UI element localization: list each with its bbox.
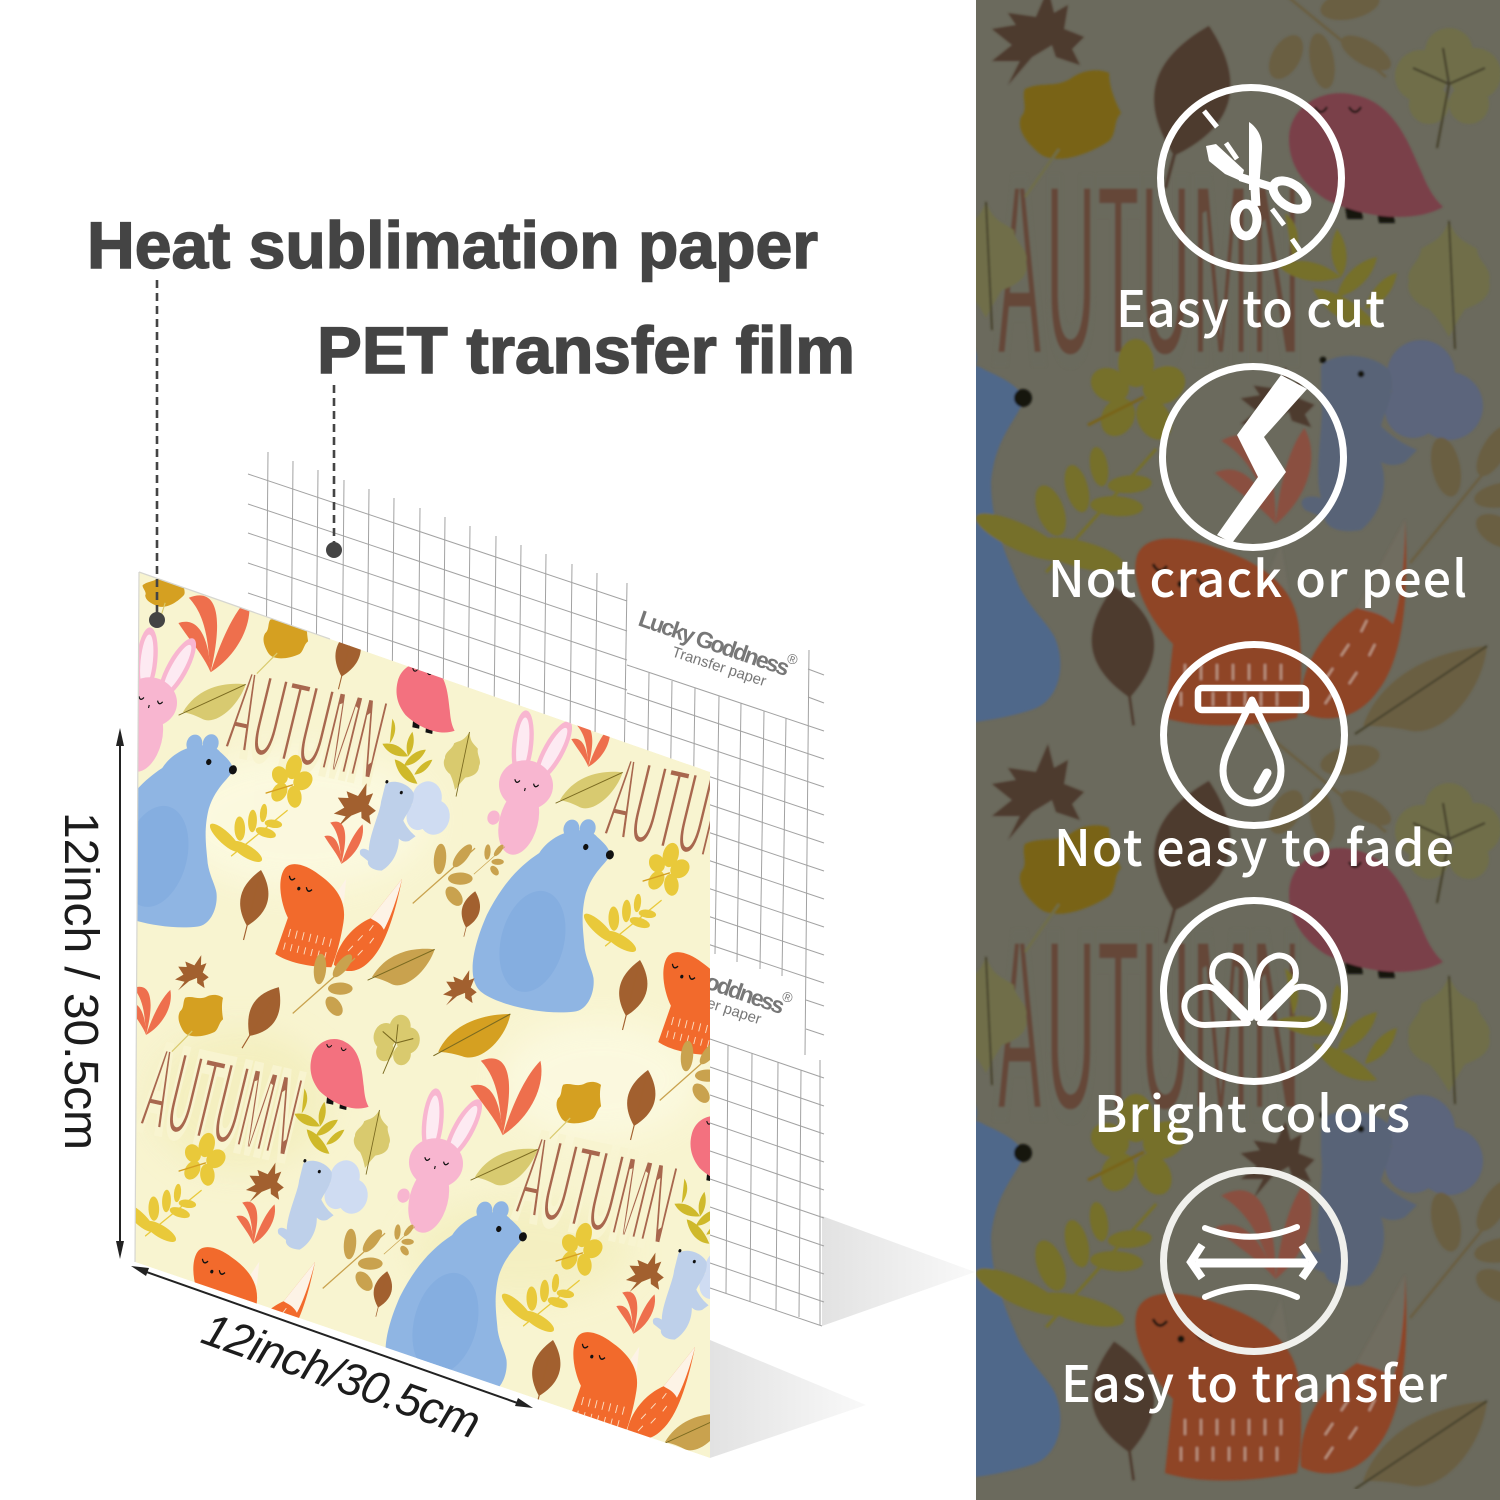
heading: PET transfer film: PET transfer film: [317, 313, 855, 387]
pattern: blue bears: [87, 716, 633, 1405]
sublimation paper with autumn animal pattern: [136, 573, 710, 1458]
label: height: 12inch / 30.5cm: [54, 812, 107, 1150]
pattern: squirrels: [274, 770, 750, 1352]
arrow: height dimension: [116, 728, 124, 1259]
background pattern artwork: AUTUMN: [994, 882, 1302, 1170]
panel: dark patterned feature column: [976, 0, 1500, 1500]
shadow: transfer film: [822, 1216, 975, 1326]
film brand label: lower: Lucky Goddness: [630, 943, 788, 1019]
pattern text: AUTUMN: [131, 643, 777, 1274]
feature: not easy to fade: [1054, 644, 1454, 881]
background pattern artwork: [976, 0, 1500, 1489]
film brand label: top: ®: [785, 650, 801, 668]
pattern: orange foxes: [175, 852, 786, 1450]
pattern: top row leaves: [138, 569, 623, 816]
arrow: width dimension: [131, 1266, 533, 1408]
icon: scissors in circle: [1160, 88, 1342, 268]
feature: not crack or peel: [1048, 366, 1467, 612]
heading: Heat sublimation paper: Heat sublimation paper: [87, 208, 818, 282]
feature: easy to cut: [1116, 88, 1385, 342]
caption: Not easy to fade: Not easy to fade: [1054, 809, 1454, 881]
leader line: sublimation paper: [149, 280, 165, 628]
pattern: pink owls: [301, 658, 763, 1192]
icon: squeegee and drop in circle: [1164, 644, 1344, 826]
pattern: pink bunnies: [104, 622, 580, 1241]
pattern text: AUTUMN: AUTUMN: [506, 1108, 688, 1274]
caption: Not crack or peel: Not crack or peel: [1048, 540, 1467, 612]
leader line: transfer film: [326, 385, 342, 558]
icon: petals in circle: [1164, 900, 1344, 1082]
PET transfer film sheet with grid: [248, 452, 824, 1326]
label: width: 12inch/30.5cm: [196, 1302, 487, 1449]
background pattern artwork: AUTUMN: [994, 127, 1302, 415]
icon: stretch arrows in circle: [1164, 1170, 1344, 1352]
film brand label: lower: ®: [780, 988, 796, 1006]
paper edge: [135, 572, 330, 1262]
icon: crack in circle: [1162, 366, 1344, 548]
pattern text: AUTUMN: AUTUMN: [131, 1020, 313, 1186]
shadow: sublimation paper: [710, 1340, 866, 1458]
pattern text: AUTUMN: AUTUMN: [216, 643, 398, 809]
pattern: scattered leaves and sprigs: [115, 750, 732, 1458]
caption: Bright colors: Bright colors: [1094, 1075, 1410, 1147]
film brand label: top: Lucky Goddness: [635, 605, 793, 681]
pattern text: AUTUMN: AUTUMN: [595, 730, 777, 896]
film brand label: top: Transfer paper: [670, 644, 768, 690]
caption: Easy to cut: Easy to cut: [1116, 270, 1385, 342]
feature: easy to transfer: [1061, 1170, 1448, 1417]
panel: white background: [0, 0, 976, 1500]
feature: bright colors: [1094, 900, 1410, 1147]
caption: Easy to transfer: Easy to transfer: [1061, 1345, 1448, 1417]
film brand label: lower: Transfer paper: [665, 982, 763, 1028]
